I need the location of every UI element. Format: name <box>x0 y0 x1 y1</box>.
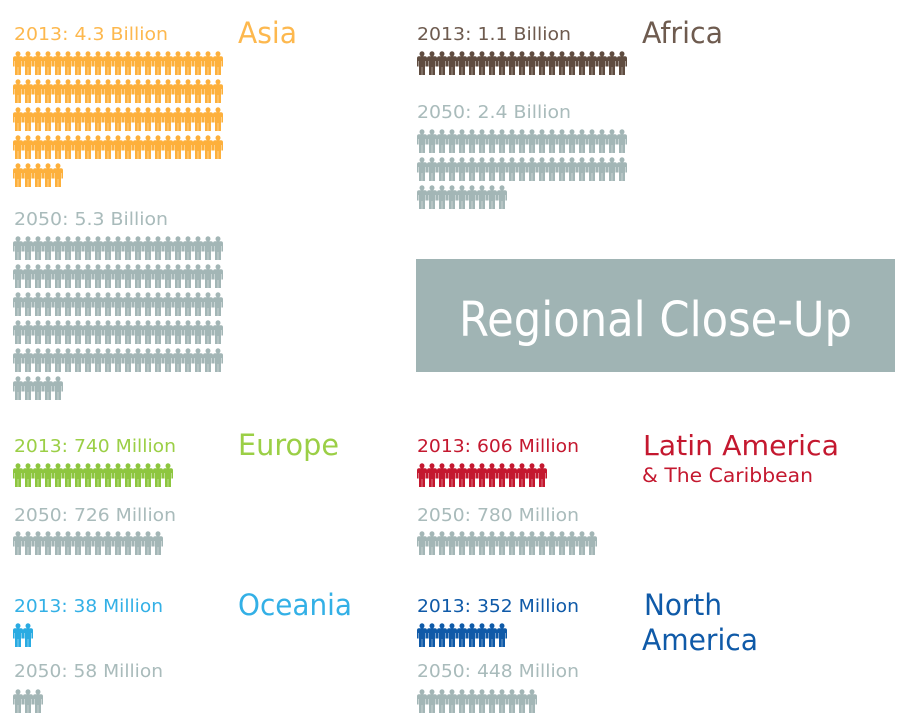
title banner: Regional Close-Up <box>459 292 852 348</box>
subheading: The Caribbean: & The Caribbean <box>642 464 813 487</box>
label: Africa 2013: 2013: 1.1 Billion <box>417 24 571 45</box>
pictogram: Asia 2050 <box>13 236 223 401</box>
heading: Latin America: Latin America <box>643 429 839 462</box>
label: Europe 2013: 2013: 740 Million <box>14 436 176 457</box>
pictogram: Europe 2013 <box>13 463 173 488</box>
title banner <box>416 259 895 372</box>
panel: Asia <box>13 16 297 401</box>
label: North America 2050: 2050: 448 Million <box>417 661 579 682</box>
heading: Africa: Africa <box>642 16 723 50</box>
label: Africa 2050: 2050: 2.4 Billion <box>417 102 571 123</box>
heading: Oceania: Oceania <box>238 588 352 622</box>
heading: Asia: Asia <box>238 16 297 50</box>
pictogram: Oceania 2013 <box>13 623 33 648</box>
pictogram: Europe 2050 <box>13 531 163 556</box>
label: Latin America 2013: 2013: 606 Million <box>417 436 579 457</box>
pictogram: Africa 2013 <box>417 51 627 76</box>
pictogram: Africa 2050 <box>417 129 627 210</box>
pictogram: Oceania 2050 <box>13 689 43 714</box>
panel: Africa <box>417 16 723 210</box>
label: Oceania 2050: 2050: 58 Million <box>14 661 163 682</box>
label: Oceania 2013: 2013: 38 Million <box>14 596 163 617</box>
pictogram: North America 2050 <box>417 689 537 714</box>
panel: Europe <box>13 428 339 556</box>
label: Latin America 2050: 2050: 780 Million <box>417 505 579 526</box>
panel: Latin America and The Caribbean <box>417 429 839 556</box>
pictogram: Latin America 2050 <box>417 531 597 556</box>
pictogram: North America 2013 <box>417 623 507 648</box>
pictogram: Asia 2013 <box>13 51 223 188</box>
heading: North America: America <box>642 623 758 657</box>
label: Asia 2050: 2050: 5.3 Billion <box>14 209 168 230</box>
panel: North America <box>417 588 758 714</box>
pictogram: Latin America 2013 <box>417 463 547 488</box>
label: Asia 2013: 2013: 4.3 Billion <box>14 24 168 45</box>
heading: North America: North <box>644 588 722 622</box>
label: North America 2013: 2013: 352 Million <box>417 596 579 617</box>
label: Europe 2050: 2050: 726 Million <box>14 505 176 526</box>
panel: Oceania <box>13 588 352 714</box>
heading: Europe: Europe <box>238 428 339 462</box>
